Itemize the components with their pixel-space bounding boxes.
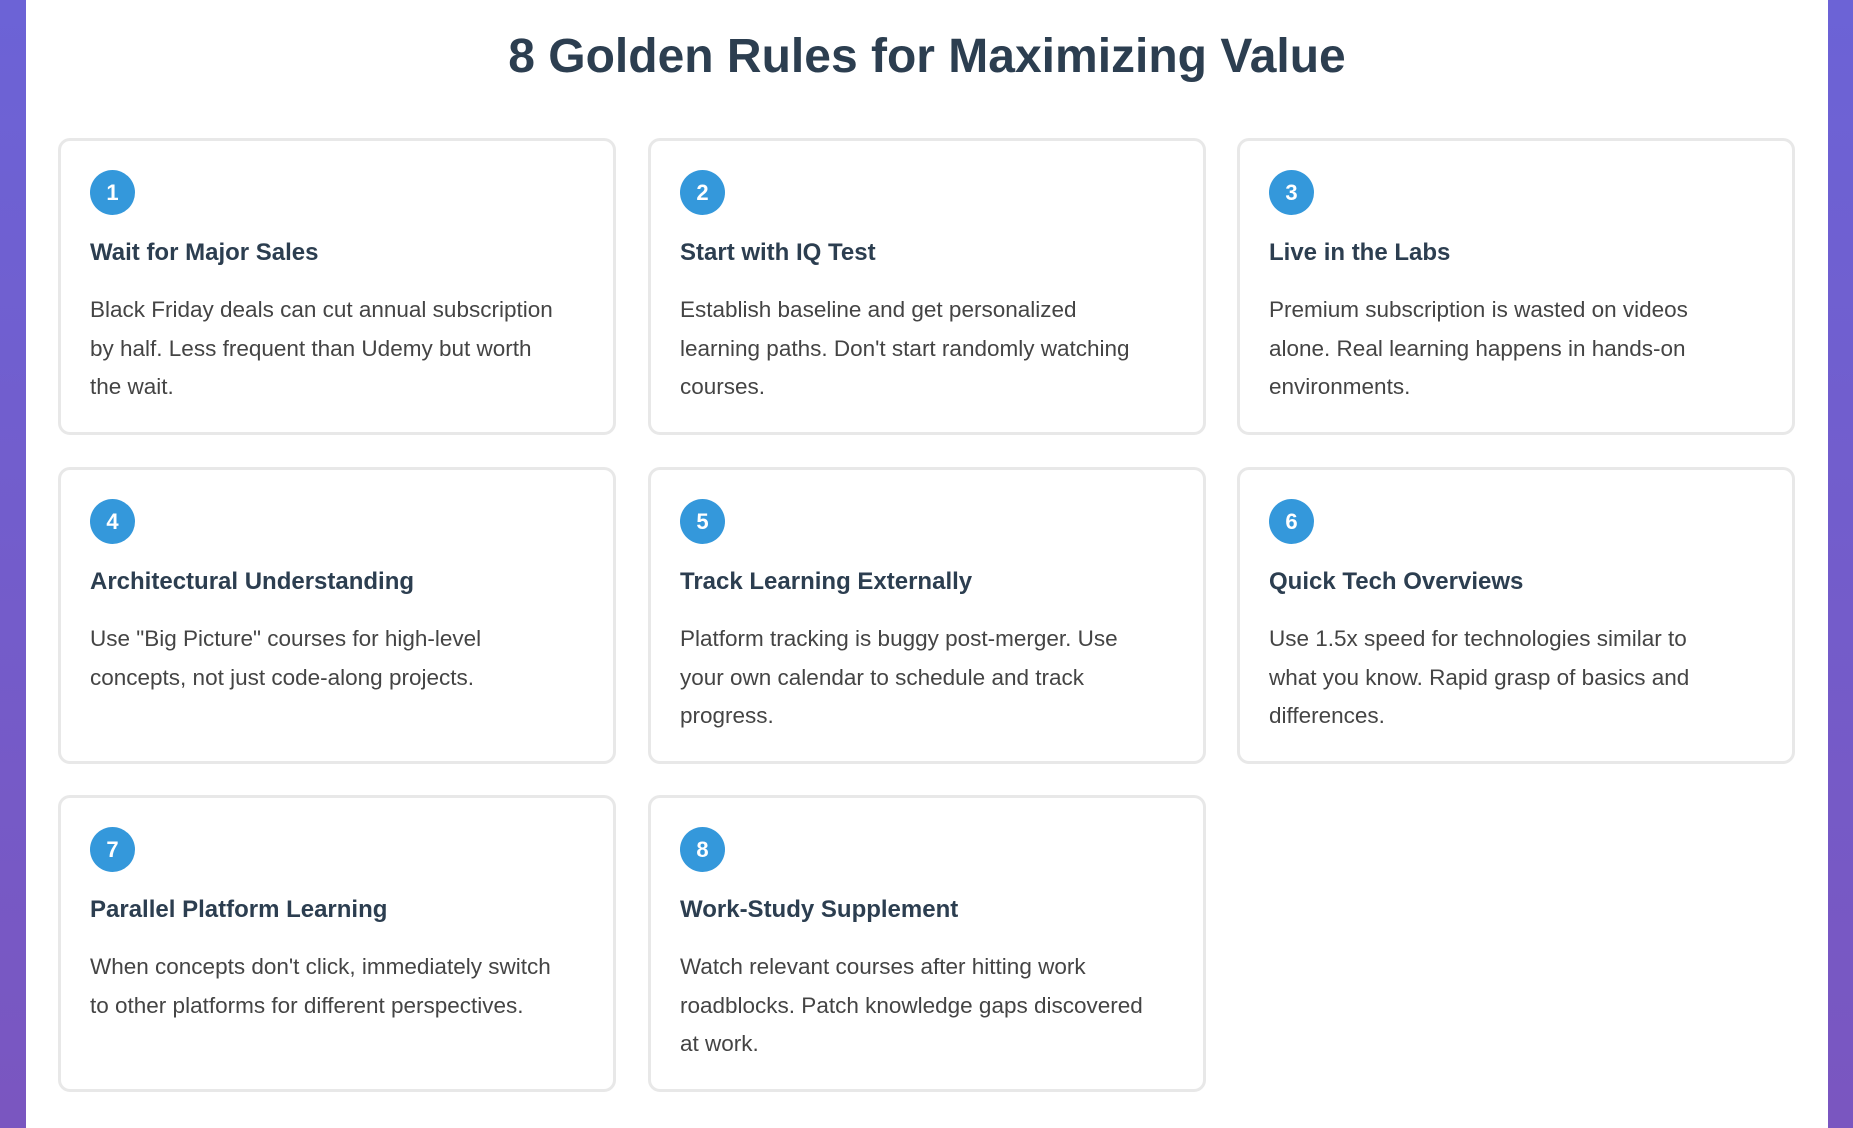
- card 3: Live in the Labs: [1269, 239, 1450, 266]
- card 6: Quick Tech Overviews: [1269, 568, 1523, 595]
- card 5: 5: [696, 509, 709, 534]
- card 4: Use "Big Picture" courses for high-level concepts, not just code-along projects.: [90, 626, 481, 690]
- card 2: [648, 138, 1206, 435]
- card 7: When concepts don't click, immediately switch to other platforms for different perspectives.: [90, 954, 551, 1018]
- card 5: [648, 467, 1206, 764]
- card 6: Use 1.5x speed for technologies similar to: [1269, 626, 1687, 651]
- card 5: Track Learning Externally: [680, 568, 972, 595]
- card 2: 2: [696, 180, 709, 205]
- card 6: differences.: [1269, 703, 1385, 728]
- card 8: 8: [696, 837, 709, 862]
- card 1: Wait for Major Sales: [90, 239, 318, 266]
- card 1: Black Friday deals can cut annual subscription by half. Less frequent than Udemy but worth the wait.: [90, 297, 553, 399]
- card 6: [1237, 467, 1795, 764]
- card 4: 4: [106, 509, 119, 534]
- card 6: 6: [1285, 509, 1298, 534]
- card 7: Parallel Platform Learning: [90, 896, 387, 923]
- card 6: what you know. Rapid grasp of basics and: [1269, 664, 1689, 690]
- card 2: Establish baseline and get personalized learning paths. Don't start randomly watching courses.: [680, 297, 1130, 399]
- card 7: 7: [106, 837, 119, 862]
- card 4: [58, 467, 616, 764]
- card 7: [58, 795, 616, 1092]
- card 8: [648, 795, 1206, 1092]
- title: 8 Golden Rules for Maximizing Value: [508, 30, 1346, 83]
- card 3: Premium subscription is wasted on videos alone. Real learning happens in hands-on environments.: [1269, 297, 1688, 399]
- card 5: Platform tracking is buggy post-merger. Use your own calendar to schedule and track progress.: [680, 626, 1118, 728]
- card 1: 1: [106, 180, 119, 205]
- card 1: [58, 138, 616, 435]
- card 2: Start with IQ Test: [680, 239, 876, 266]
- card 8: Watch relevant courses after hitting work roadblocks. Patch knowledge gaps discovered at work.: [680, 954, 1143, 1056]
- card 4: Architectural Understanding: [90, 568, 414, 595]
- card 8: Work-Study Supplement: [680, 896, 958, 923]
- card 3: 3: [1285, 180, 1298, 205]
- card 3: [1237, 138, 1795, 435]
